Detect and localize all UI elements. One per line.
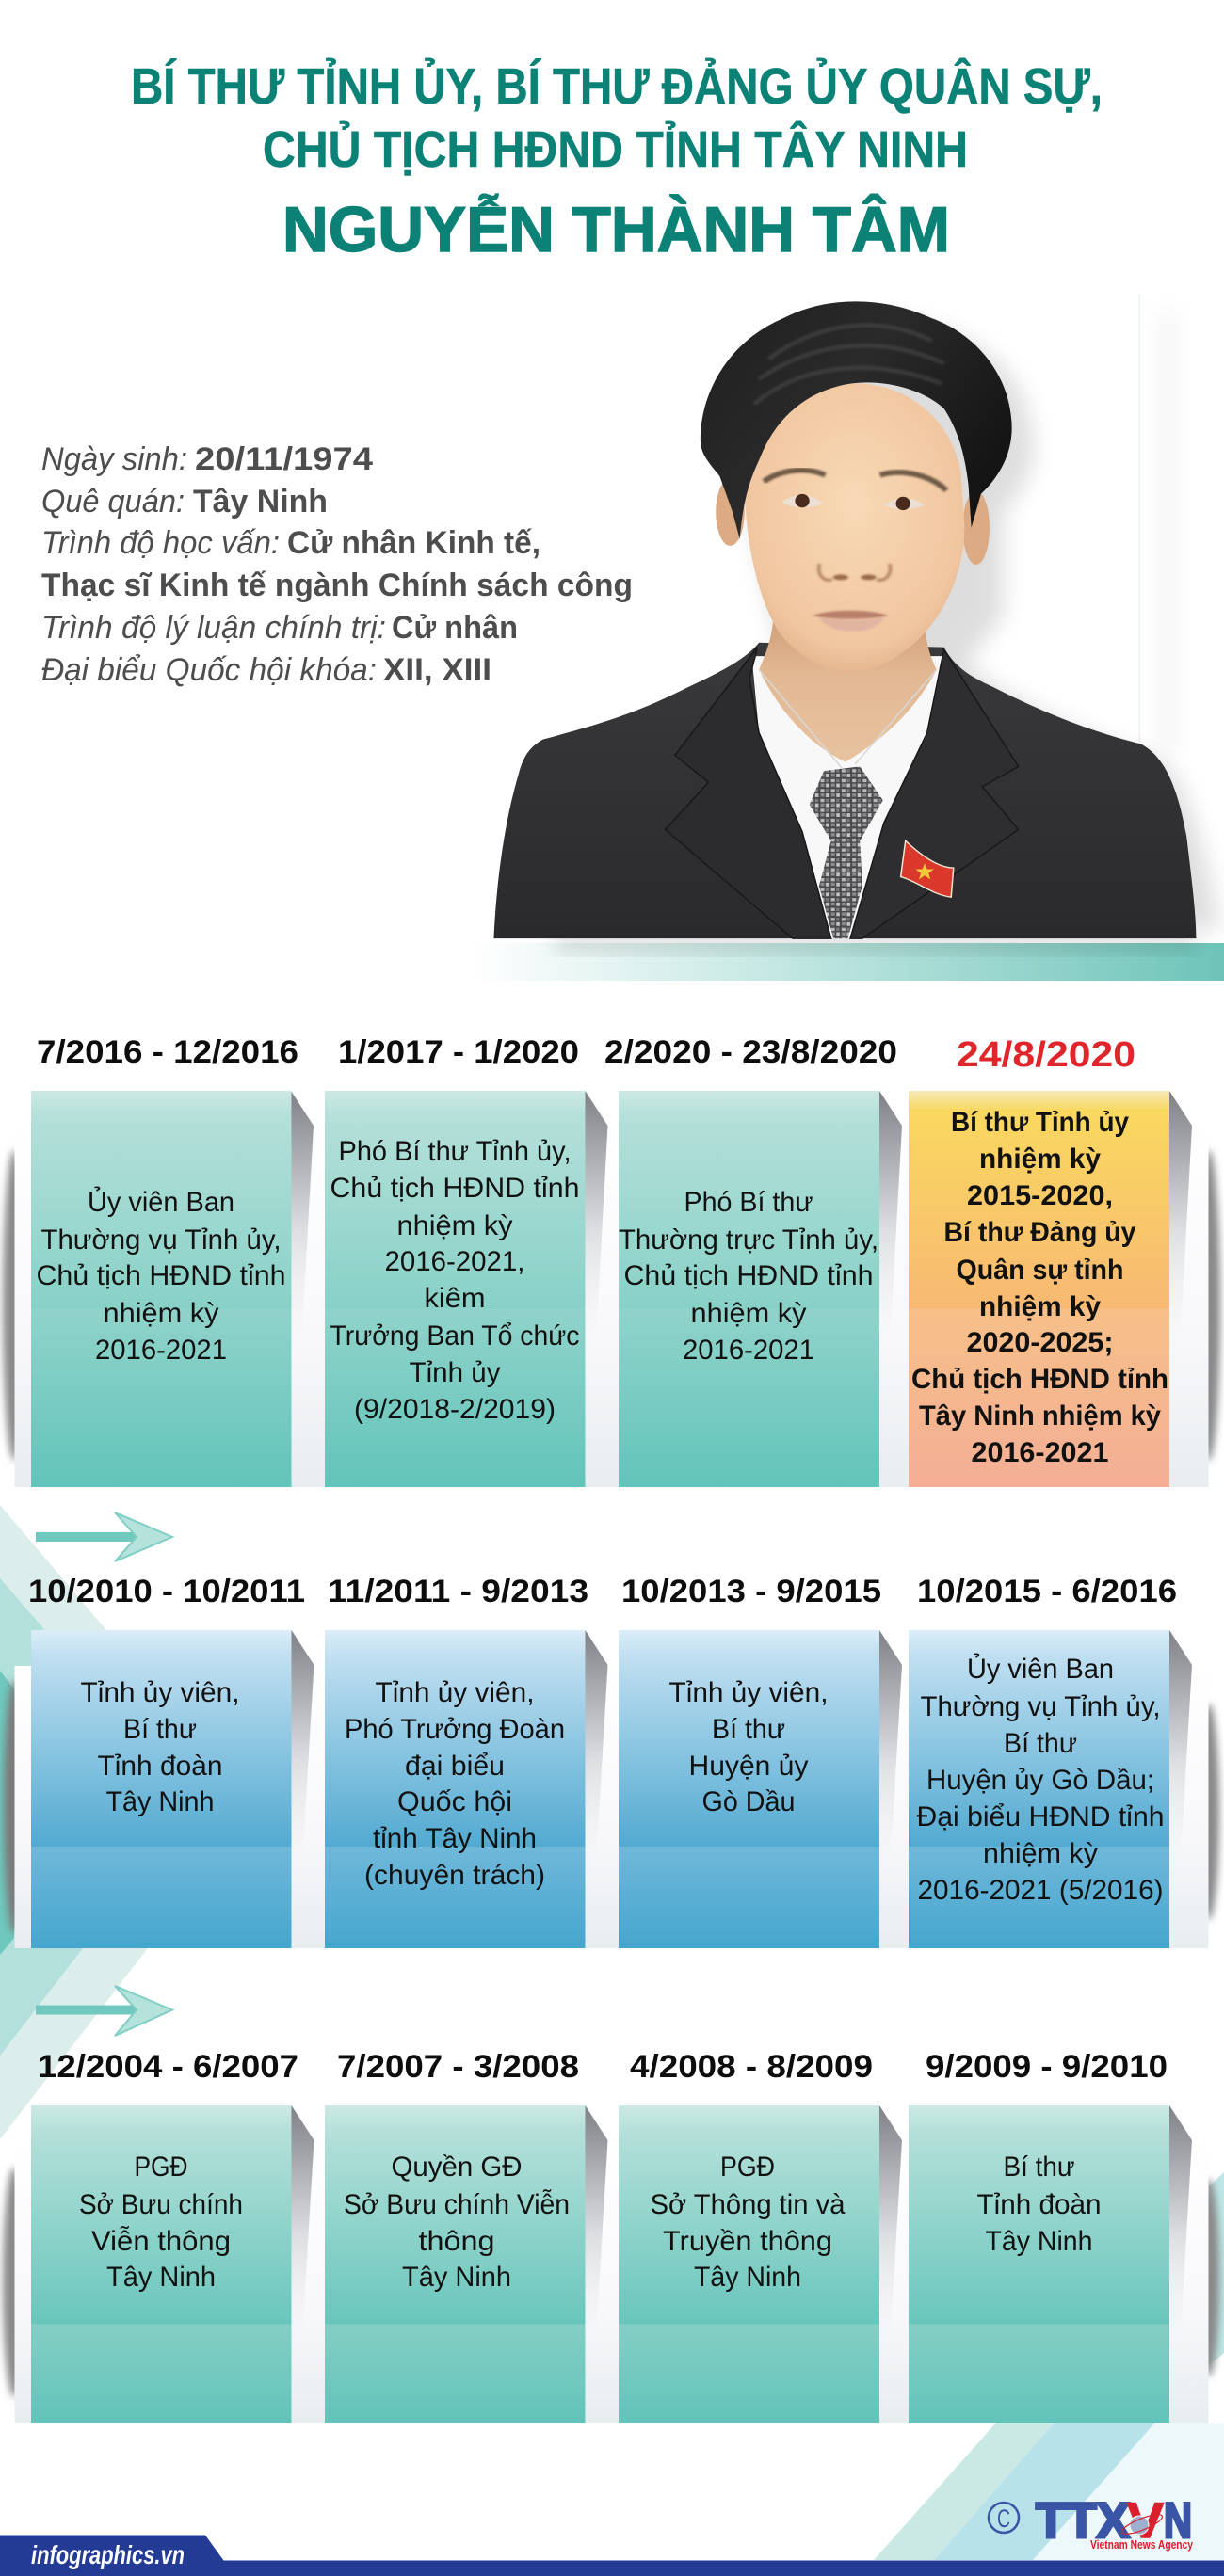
- hair: [701, 301, 1012, 539]
- date: 10/2015 - 6/2016: 10/2015 - 6/2016: [917, 1574, 1177, 1609]
- backing panel: [15, 1123, 1209, 1487]
- logo: TTXVN: TTX: [1036, 2493, 1130, 2549]
- card 7/2016: Chủ tịch HĐND tỉnh: [36, 1260, 286, 1291]
- card 24/8/2020 highlighted: Bí thư Tỉnh ủy: [951, 1107, 1129, 1138]
- right lapel: [850, 649, 1019, 938]
- collar shading: [759, 670, 937, 768]
- card 24/8/2020 highlighted: 2020-2025;: [966, 1327, 1113, 1358]
- card 11/2011: Quốc hội: [397, 1786, 512, 1817]
- date: 2/2020 - 23/8/2020: 2/2020 - 23/8/2020: [604, 1034, 897, 1070]
- card 24/8/2020 highlighted: [909, 1091, 1192, 1487]
- card 2/2020: Thường trực Tỉnh ủy,: [619, 1224, 878, 1256]
- card 7/2007: Quyền GĐ: [392, 2152, 522, 2183]
- left edge shadow: [3, 2168, 25, 2397]
- arrow between row 2 and row 3: [36, 1986, 172, 2036]
- title: BÍ THƯ TỈNH ỦY, BÍ THƯ ĐẢNG ỦY QUÂN SỰ,: [131, 57, 1103, 115]
- personal information: Cử nhân Kinh tế,: [287, 525, 540, 561]
- date: 9/2009 - 9/2010: 9/2009 - 9/2010: [926, 2049, 1168, 2085]
- card 11/2011: Tỉnh ủy viên,: [375, 1677, 535, 1708]
- card 10/2010: Bí thư: [123, 1714, 197, 1745]
- card 1/2017: Trưởng Ban Tổ chức: [330, 1320, 580, 1352]
- card 10/2015: Bí thư: [1004, 1728, 1077, 1759]
- right edge shadow: [1199, 1704, 1219, 1920]
- backing panel: [15, 1666, 1209, 1948]
- portrait photo illustration: [493, 301, 1196, 938]
- card 1/2017: (9/2018-2/2019): [354, 1394, 556, 1425]
- card 1/2017: kiêm: [424, 1283, 486, 1314]
- card 7/2016: Ủy viên Ban: [88, 1186, 234, 1218]
- logo: TTXVN: V: [1127, 2493, 1164, 2549]
- card 12/2004: Tây Ninh: [106, 2262, 216, 2293]
- card 1/2017: Phó Bí thư Tỉnh ủy,: [339, 1136, 571, 1167]
- card 10/2015: nhiệm kỳ: [983, 1838, 1098, 1869]
- date: 24/8/2020: 24/8/2020: [957, 1035, 1135, 1075]
- date: 4/2008 - 8/2009: 4/2008 - 8/2009: [630, 2049, 873, 2085]
- card 2/2020: Chủ tịch HĐND tỉnh: [623, 1260, 874, 1291]
- card 10/2015: Huyện ủy Gò Dầu;: [926, 1765, 1154, 1796]
- face: [744, 383, 964, 672]
- card 12/2004: PGĐ: [134, 2152, 188, 2183]
- card 10/2015: Ủy viên Ban: [967, 1653, 1114, 1685]
- copyright symbol: [989, 2503, 1019, 2533]
- personal information: Trình độ học vấn:: [41, 525, 280, 561]
- logo: TTXVN: [1036, 2493, 1194, 2552]
- personal information: Đại biểu Quốc hội khóa:: [41, 652, 377, 688]
- card 10/2015: 2016-2021 (5/2016): [917, 1875, 1164, 1906]
- timeline row 2: [4, 1574, 1219, 1948]
- date: 11/2011 - 9/2013: 11/2011 - 9/2013: [328, 1574, 588, 1609]
- left lapel: [666, 648, 831, 938]
- personal information: Trình độ lý luận chính trị:: [41, 610, 386, 646]
- date: 10/2010 - 10/2011: 10/2010 - 10/2011: [28, 1574, 305, 1609]
- date: 1/2017 - 1/2020: 1/2017 - 1/2020: [338, 1034, 579, 1070]
- right edge shadow: [1198, 1150, 1220, 1461]
- necktie: [810, 766, 883, 938]
- card 9/2009: Tây Ninh: [985, 2226, 1092, 2257]
- card 10/2013: [619, 1630, 902, 1948]
- personal information: Cử nhân: [392, 610, 518, 646]
- card 7/2016: nhiệm kỳ: [104, 1298, 218, 1329]
- date: 7/2007 - 3/2008: 7/2007 - 3/2008: [337, 2049, 579, 2085]
- backing panel: [15, 2141, 1209, 2423]
- card 10/2013: Tỉnh ủy viên,: [668, 1677, 829, 1708]
- left ear: [716, 478, 745, 546]
- card 10/2010: Tỉnh đoàn: [98, 1751, 222, 1782]
- card 9/2009: Bí thư: [1004, 2152, 1075, 2183]
- card 4/2008: PGĐ: [720, 2152, 775, 2183]
- right edge shadow: [1199, 2179, 1219, 2376]
- personal information: 20/11/1974: [195, 441, 373, 477]
- card 1/2017: 2016-2021,: [384, 1246, 525, 1277]
- neck: [759, 616, 937, 762]
- card 24/8/2020 highlighted: nhiệm kỳ: [979, 1144, 1101, 1175]
- title: CHỦ TỊCH HĐND TỈNH TÂY NINH: [263, 120, 968, 178]
- timeline row 3: [3, 2049, 1219, 2423]
- card 1/2017: nhiệm kỳ: [397, 1210, 512, 1241]
- footer bar: infographics.vn: [31, 2540, 185, 2569]
- personal information: Quê quán:: [41, 484, 185, 520]
- card 1/2017: [325, 1091, 608, 1487]
- card 10/2013: Bí thư: [712, 1714, 785, 1745]
- card 4/2008: Tây Ninh: [694, 2262, 801, 2293]
- card 7/2007: Tây Ninh: [402, 2262, 511, 2293]
- card 1/2017: Chủ tịch HĐND tỉnh: [330, 1173, 580, 1204]
- card 10/2015: [909, 1630, 1192, 1948]
- personal information: XII, XIII: [383, 652, 491, 688]
- card 11/2011: tỉnh Tây Ninh: [373, 1823, 537, 1854]
- arrow between row 1 and row 2: [36, 1512, 172, 1561]
- card 7/2016: 2016-2021: [95, 1335, 227, 1366]
- card 1/2017: Tỉnh ủy: [409, 1357, 501, 1388]
- card 10/2013: Gò Dầu: [702, 1786, 795, 1817]
- right ear: [962, 491, 990, 565]
- hair highlights: [754, 326, 944, 404]
- card 2/2020: Phó Bí thư: [684, 1187, 813, 1218]
- card 2/2020: nhiệm kỳ: [691, 1298, 806, 1329]
- card 12/2004: Sở Bưu chính: [79, 2189, 243, 2220]
- card 2/2020: 2016-2021: [683, 1335, 814, 1366]
- card 10/2010: Tây Ninh: [105, 1786, 215, 1817]
- right eyebrow: [880, 472, 946, 490]
- personal information: Ngày sinh:: [41, 441, 187, 477]
- jacket: [493, 643, 1196, 938]
- card 7/2007: Sở Bưu chính Viễn: [344, 2189, 570, 2220]
- card 2/2020: [619, 1091, 902, 1487]
- right eye: [885, 497, 924, 510]
- logo: TTXVN: N: [1164, 2493, 1192, 2549]
- portrait shadow: [542, 318, 1219, 952]
- card 24/8/2020 highlighted: Quân sự tỉnh: [957, 1255, 1124, 1286]
- card 7/2016: Thường vụ Tỉnh ủy,: [41, 1224, 281, 1256]
- personal information: Tây Ninh: [193, 484, 328, 520]
- card 4/2008: [619, 2105, 902, 2423]
- date: 7/2016 - 12/2016: 7/2016 - 12/2016: [37, 1034, 298, 1070]
- shirt: [751, 656, 944, 938]
- date: 10/2013 - 9/2015: 10/2013 - 9/2015: [621, 1574, 881, 1609]
- card 12/2004: [31, 2105, 314, 2423]
- background: lower right stripes: [874, 2172, 1224, 2560]
- card 24/8/2020 highlighted: Bí thư Đảng ủy: [943, 1217, 1136, 1248]
- card 10/2010: [31, 1630, 314, 1948]
- card 10/2015: Thường vụ Tỉnh ủy,: [921, 1691, 1160, 1722]
- title: [131, 57, 1103, 265]
- left eye: [782, 494, 823, 507]
- background: left chevrons: [0, 1505, 148, 2139]
- copyright symbol: C: [997, 2504, 1010, 2533]
- personal information: [41, 441, 633, 688]
- title: NGUYỄN THÀNH TÂM: [282, 193, 950, 265]
- card 11/2011: (chuyên trách): [364, 1860, 545, 1891]
- delegate pin: [901, 840, 954, 897]
- date: 12/2004 - 6/2007: 12/2004 - 6/2007: [38, 2049, 298, 2085]
- mouth: [813, 611, 889, 632]
- logo: TTXVN: Vietnam News Agency: [1090, 2537, 1194, 2552]
- card 11/2011: [325, 1630, 608, 1948]
- personal information: Thạc sĩ Kinh tế ngành Chính sách công: [41, 568, 633, 603]
- left eyebrow: [764, 471, 826, 481]
- card 12/2004: Viễn thông: [91, 2226, 231, 2257]
- portrait backdrop: line and soft shade: [1139, 294, 1183, 753]
- card 9/2009: Tỉnh đoàn: [977, 2189, 1102, 2220]
- nose: [819, 564, 891, 580]
- teal band under portrait: [471, 943, 1224, 981]
- card 4/2008: Truyền thông: [663, 2226, 832, 2257]
- card 10/2013: Huyện ủy: [689, 1751, 808, 1782]
- card 24/8/2020 highlighted: 2015-2020,: [967, 1180, 1113, 1211]
- card 11/2011: Phó Trưởng Đoàn: [345, 1714, 565, 1745]
- card 24/8/2020 highlighted: Chủ tịch HĐND tỉnh: [911, 1364, 1168, 1395]
- left edge shadow: [4, 1680, 24, 1934]
- card 4/2008: Sở Thông tin và: [650, 2189, 846, 2220]
- card 10/2010: Tỉnh ủy viên,: [81, 1677, 239, 1708]
- timeline row 1: [3, 1034, 1220, 1487]
- footer bar: [0, 2536, 1224, 2576]
- card 24/8/2020 highlighted: 2016-2021: [972, 1437, 1109, 1468]
- card 24/8/2020 highlighted: nhiệm kỳ: [979, 1291, 1101, 1322]
- card 7/2007: thông: [418, 2226, 495, 2257]
- card 11/2011: đại biểu: [405, 1751, 505, 1782]
- card 7/2016: [31, 1091, 314, 1487]
- card 7/2007: [325, 2105, 608, 2423]
- left edge shadow: [3, 1150, 25, 1461]
- card 9/2009: [909, 2105, 1192, 2423]
- card 24/8/2020 highlighted: Tây Ninh nhiệm kỳ: [919, 1400, 1161, 1432]
- card 10/2015: Đại biểu HĐND tỉnh: [917, 1801, 1164, 1832]
